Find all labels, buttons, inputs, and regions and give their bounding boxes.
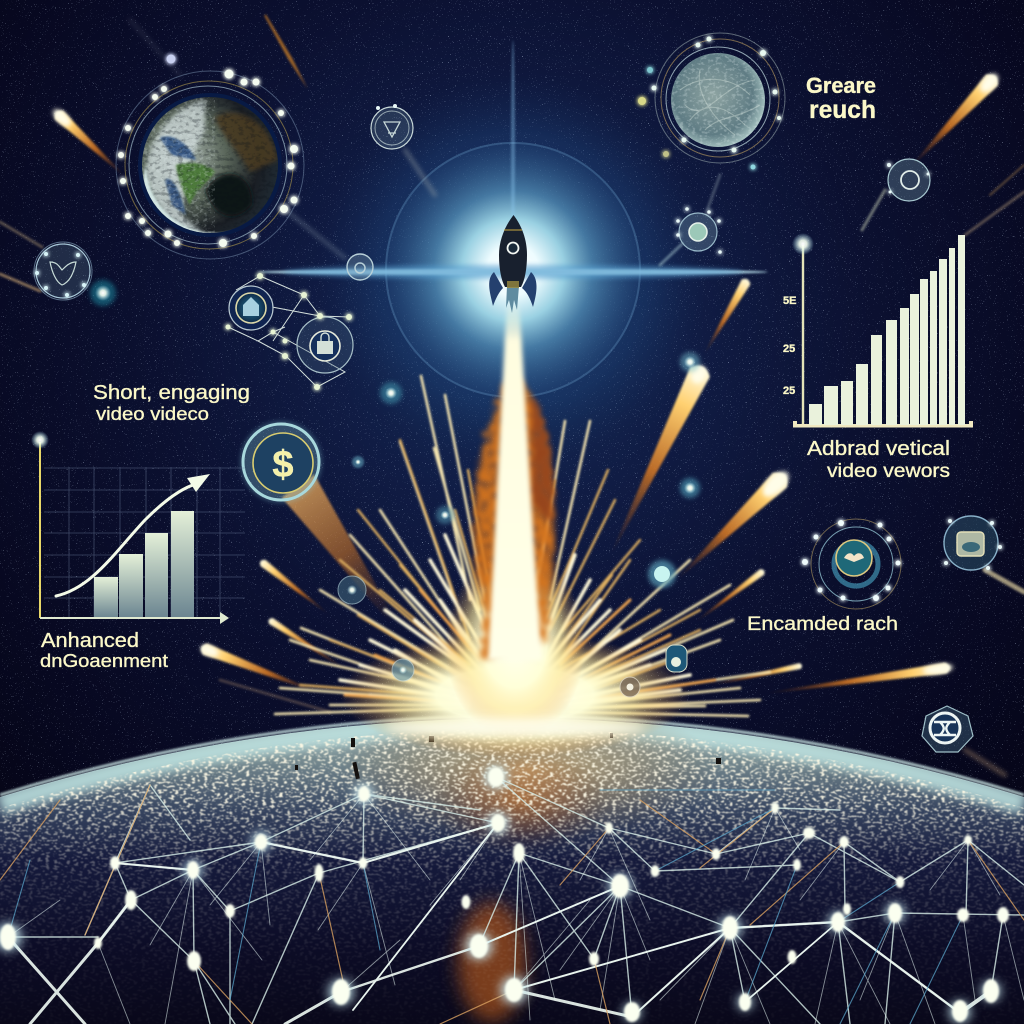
icon: heart target ring: [802, 519, 901, 609]
icon: face ring, far left: [34, 242, 92, 300]
label: vertical video viewers: [807, 438, 950, 482]
bar chart: vertical video viewers: 5E: [783, 295, 796, 307]
icon: small ring on flare line: [347, 254, 373, 280]
bar chart: vertical video viewers: [783, 233, 973, 428]
horizon globe with crowd of points: [0, 700, 1024, 1024]
comets: [50, 14, 1003, 699]
icon: hexagon lower right: [922, 706, 973, 752]
icon: ring with glyph, top center: [371, 104, 413, 149]
label: vertical video viewers: Adbrad vetical: [807, 438, 950, 460]
label: vertical video viewers: video vewors: [827, 461, 950, 482]
icon: dollar coin: [240, 421, 322, 503]
network of connected nodes: [0, 777, 1024, 1024]
label: enhanced engagement: [40, 630, 168, 671]
icon: ring center right top: [676, 207, 722, 254]
network node lights: [0, 765, 1009, 1023]
label: short engaging video: Short, engaging: [93, 382, 250, 404]
bar chart: vertical video viewers: 25: [783, 385, 795, 397]
icon: ring far right: [944, 516, 1002, 570]
label: greater reach: [806, 73, 876, 124]
rocket lens flare halo: [258, 40, 768, 465]
label: greater reach: Greare: [806, 73, 876, 98]
icon: dollar coin: $: [272, 444, 294, 486]
label: short engaging video: [93, 382, 250, 424]
earth planet with orbit rings: [116, 54, 304, 259]
small orbs along the blast: [338, 352, 700, 697]
label: enhanced engagement: Anhanced: [41, 630, 139, 652]
rocket: [489, 215, 537, 313]
network diagram with icons: [226, 273, 353, 390]
label: enhanced engagement: dnGoaenment: [40, 651, 168, 671]
icon: ring top right: [887, 159, 930, 201]
rocket exhaust flame: [474, 305, 555, 660]
moon planet with orbit rings: [638, 33, 785, 170]
bar chart: enhanced engagement: [31, 431, 245, 624]
explosion rays: [275, 376, 770, 716]
icon: small glowing orb: [90, 280, 116, 306]
blast glow at horizon: [340, 550, 690, 757]
faint streaks behind icons: [0, 20, 1024, 775]
bar chart: vertical video viewers: 25: [783, 343, 795, 355]
label: expanded reach: Encamded rach: [747, 614, 898, 635]
label: short engaging video: video videco: [96, 404, 209, 424]
label: greater reach: reuch: [809, 96, 876, 124]
